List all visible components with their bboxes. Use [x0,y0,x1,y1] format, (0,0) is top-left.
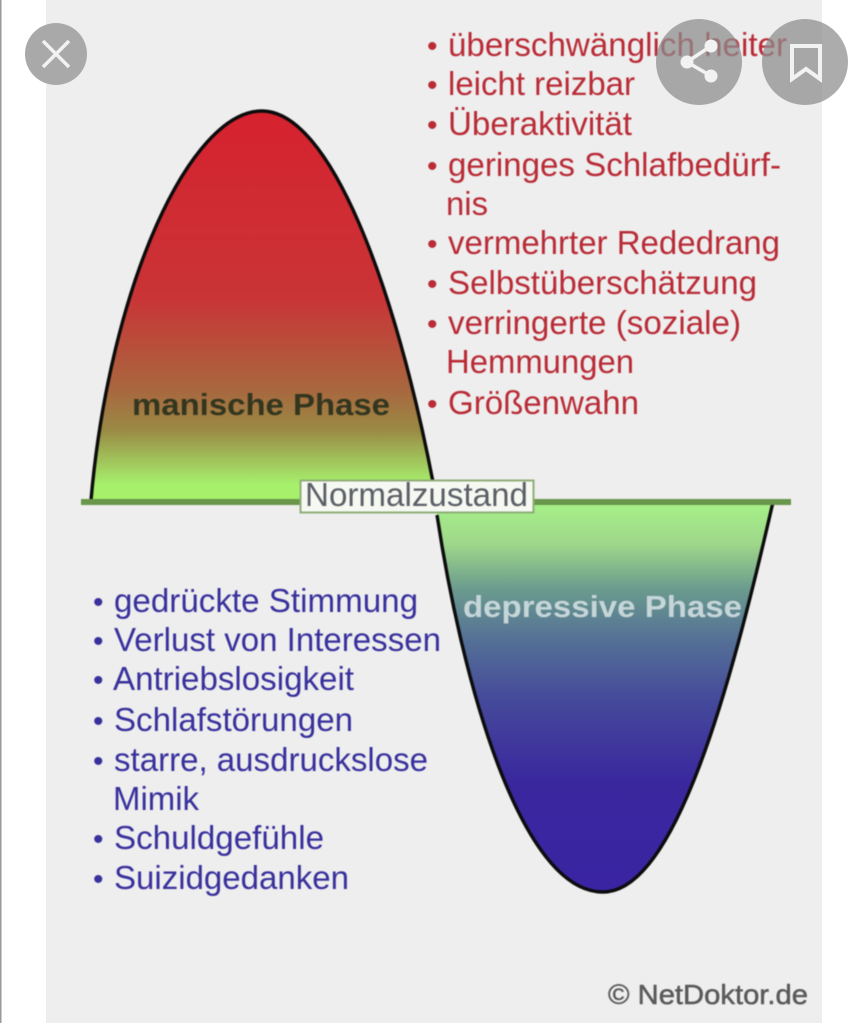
text block: manic symptoms: • [427,30,438,63]
text block: manic symptoms: geringes Schlafbedürf- [448,146,781,183]
text block: depressive symptoms: • [93,745,104,778]
text block: manic symptoms: überschwänglich heiter [448,26,787,63]
text block: depressive symptoms [93,582,441,896]
label: Normalzustand: Normalzustand [305,476,528,513]
label: depressive Phase: depressive Phase [463,589,742,624]
chart: curve outline [91,111,773,892]
text block: depressive symptoms: gedrückte Stimmung [114,582,418,619]
text block: manic symptoms: Überaktivität [448,105,632,142]
text block: depressive symptoms: Schuldgefühle [114,819,324,856]
text block: manic symptoms: • [427,268,438,301]
icon: close button [25,23,87,85]
text block: depressive symptoms: • [93,586,104,619]
text block: manic symptoms: • [427,150,438,183]
icon: share button [656,19,742,105]
text block: depressive symptoms: • [93,625,104,658]
chart: depressive curve [437,502,773,892]
text block: manic symptoms: vermehrter Rededrang [448,224,780,261]
label: manische Phase: manische Phase [132,387,390,422]
text block: depressive symptoms: • [93,705,104,738]
text block: manic symptoms: • [427,308,438,341]
text block: depressive symptoms: Antriebslosigkeit [113,660,354,697]
text block: manic symptoms: Selbstüberschätzung [448,264,757,301]
text block: depressive symptoms: Mimik [113,780,199,817]
text block: depressive symptoms: • [93,863,104,896]
text block: manic symptoms: Größenwahn [448,384,639,421]
icon: bookmark button [762,19,848,105]
text block: manic symptoms: • [427,69,438,102]
text block: depressive symptoms: Suizidgedanken [114,859,349,896]
chart: manic curve [91,111,433,500]
text block: manic symptoms: • [427,228,438,261]
credit: © NetDoktor.de [608,979,808,1010]
text block: depressive symptoms: • [93,823,104,856]
text block: manic symptoms: leicht reizbar [448,65,635,102]
text block: depressive symptoms: • [93,664,104,697]
text block: manic symptoms [427,26,787,421]
text block: manic symptoms: nis [446,185,488,222]
baseline [81,499,791,505]
text block: manic symptoms: Hemmungen [446,343,634,380]
text block: manic symptoms: • [427,388,438,421]
text block: depressive symptoms: Schlafstörungen [114,701,353,738]
text block: manic symptoms: verringerte (soziale) [448,304,741,341]
text block: depressive symptoms: Verlust von Interessen [114,621,441,658]
text block: depressive symptoms: starre, ausdruckslose [114,741,428,778]
text block: manic symptoms: • [427,109,438,142]
